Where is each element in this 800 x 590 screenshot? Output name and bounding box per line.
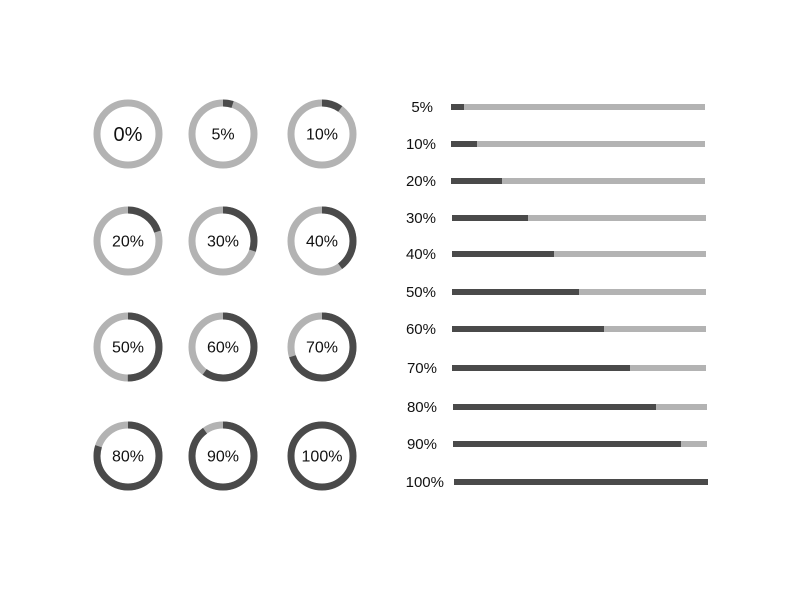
donut 30%: 30%	[207, 234, 239, 250]
donut 60%: 60%	[207, 340, 239, 356]
bar 10%	[406, 136, 705, 153]
bar 20%	[406, 173, 705, 190]
bar 5%: 5%	[411, 99, 433, 116]
donut 40%: 40%	[306, 234, 338, 250]
bar 40%	[406, 246, 706, 263]
bar 30%: 30%	[406, 210, 436, 227]
donut 10%: 10%	[306, 126, 338, 144]
panel: donut charts	[97, 103, 353, 487]
donut 100%: 100%	[302, 448, 342, 466]
bar 20%: 20%	[406, 173, 436, 190]
donut 30%	[192, 210, 254, 272]
bar 50%	[406, 284, 706, 301]
bar 80%: 80%	[407, 399, 437, 416]
bar 70%: 70%	[407, 360, 437, 377]
donut 50%	[97, 316, 159, 378]
panel: progress bars	[406, 99, 708, 491]
bar 90%: 90%	[407, 436, 437, 453]
donut 80%	[97, 425, 159, 487]
bar 50%: 50%	[406, 284, 436, 301]
donut 40%	[291, 210, 353, 272]
donut 70%	[291, 316, 353, 378]
bar 40%: 40%	[406, 246, 436, 263]
bar 5%	[411, 99, 705, 116]
donut 50%: 50%	[112, 340, 144, 356]
donut 100%	[291, 425, 353, 487]
donut 80%: 80%	[112, 448, 144, 466]
donut 0%: 0%	[114, 124, 143, 146]
bar 100%	[406, 474, 708, 491]
donut 5%	[192, 103, 254, 165]
bar 90%	[407, 436, 707, 453]
bar 100%: 100%	[406, 474, 444, 491]
bar 70%	[407, 360, 706, 377]
donut 20%	[97, 210, 159, 272]
donut 60%	[192, 316, 254, 378]
bar 30%	[406, 210, 706, 227]
donut 0%	[97, 103, 159, 165]
donut 5%: 5%	[211, 126, 235, 144]
donut 20%: 20%	[112, 234, 144, 250]
donut 90%	[192, 425, 254, 487]
bar 80%	[407, 399, 707, 416]
donut 70%: 70%	[306, 340, 338, 356]
donut 90%: 90%	[207, 448, 239, 466]
bar 10%: 10%	[406, 136, 436, 153]
bar 60%: 60%	[406, 321, 436, 338]
donut 10%	[291, 103, 353, 165]
bar 60%	[406, 321, 706, 338]
